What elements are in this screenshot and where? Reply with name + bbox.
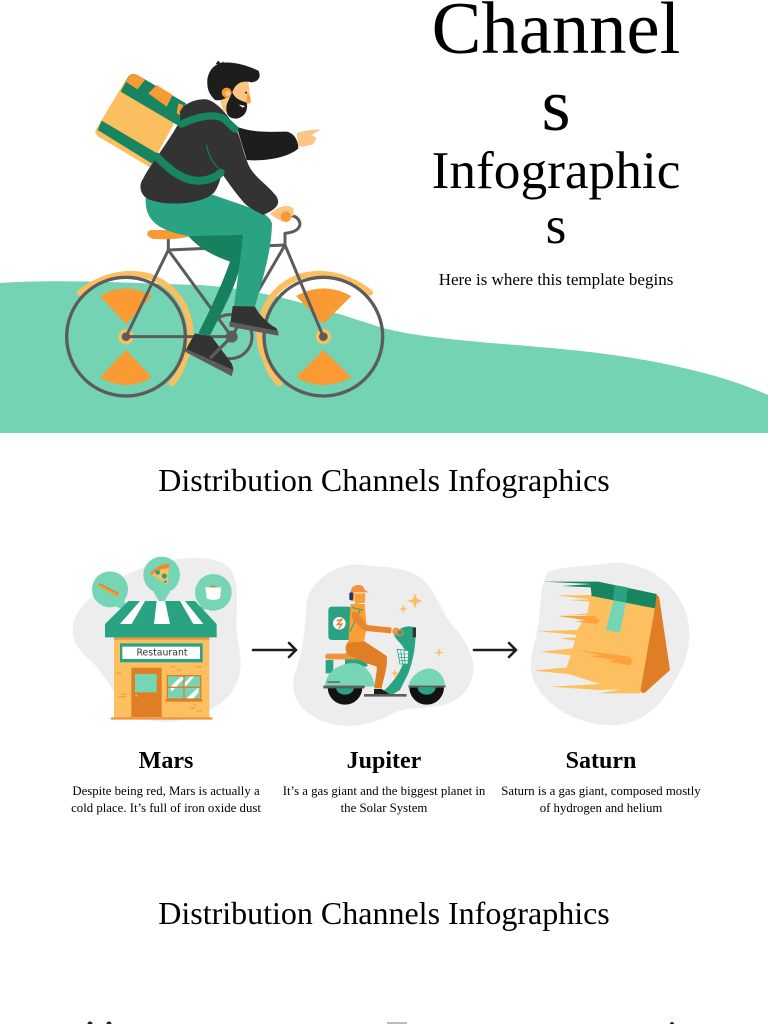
far shoe [185, 333, 233, 376]
scooter body [323, 626, 446, 697]
near shoe [230, 306, 278, 335]
crank and bottom bracket [210, 331, 238, 358]
tape strap [606, 585, 628, 633]
backpack straps [157, 116, 235, 181]
rear fender [80, 274, 191, 383]
illustration: cyclist on bicycle [67, 61, 383, 396]
icon: restaurant [73, 557, 241, 722]
column: mars: Despite being red, Mars is actually a [72, 784, 260, 798]
rider arm [352, 612, 392, 633]
rider straps [350, 607, 363, 632]
orange motion marks [557, 616, 633, 665]
restaurant sign [120, 643, 203, 662]
column: jupiter: It’s a gas giant and the biggest planet in [283, 784, 486, 798]
jacket [140, 99, 278, 215]
package top flap [543, 582, 657, 608]
column: saturn [501, 748, 701, 815]
icon: speeding package [531, 563, 689, 725]
rear wheel [67, 277, 185, 396]
column: jupiter [283, 748, 486, 815]
rider head and helmet [349, 585, 369, 604]
main title: Infographic [432, 140, 680, 200]
near leg trousers [146, 195, 272, 307]
clipped tops of next row icons [88, 1022, 674, 1024]
bubble food glyphs [98, 563, 221, 600]
grey blob [531, 563, 689, 725]
scooter wheels [328, 687, 444, 705]
handlebar grip [281, 211, 291, 222]
package side [640, 595, 670, 693]
column: saturn: Saturn [566, 748, 636, 774]
sparkle stars [390, 593, 444, 678]
shop window [166, 676, 202, 702]
bricks [117, 667, 202, 711]
rider leg [346, 641, 387, 688]
arrow: jupiter to saturn [474, 643, 516, 657]
green hill background [0, 281, 768, 433]
delivery bag [328, 607, 352, 640]
seat [325, 654, 367, 659]
main title [432, 0, 680, 255]
pointing hand [297, 129, 321, 147]
backpack [95, 74, 186, 167]
grey blob [293, 564, 473, 726]
dark far leg [188, 234, 243, 337]
rider hand on handlebar [392, 628, 403, 636]
section heading two: Distribution Channels Infographics [158, 895, 610, 931]
rider torso [348, 604, 367, 643]
column: saturn: Saturn is a gas giant, composed mostly [501, 784, 701, 798]
main title: s [541, 64, 571, 147]
food bubbles [92, 557, 232, 612]
column: saturn: of hydrogen and helium [540, 801, 662, 815]
package front with motion streaks [533, 595, 655, 693]
section heading one: Distribution Channels Infographics [158, 462, 610, 498]
subtitle: Here is where this template begins [439, 270, 673, 289]
icon: scooter delivery [293, 564, 473, 726]
pavement [111, 717, 213, 720]
grey blob [73, 558, 241, 722]
column: mars: cold place. It’s full of iron oxide dust [71, 801, 261, 815]
column: jupiter: the Solar System [341, 801, 427, 815]
main title: s [546, 195, 566, 255]
column: mars: Mars [139, 748, 193, 774]
shop building [114, 637, 209, 718]
head [207, 61, 260, 119]
saddle [147, 230, 189, 239]
door [131, 668, 162, 717]
rider shoe [374, 689, 389, 694]
bicycle frame [126, 216, 323, 359]
striped awning [105, 601, 217, 637]
front fender [259, 274, 370, 383]
far arm [237, 127, 298, 160]
column: mars [71, 748, 261, 815]
hand on handlebar [270, 206, 294, 222]
basket [397, 649, 409, 664]
restaurant sign: Restaurant [136, 648, 188, 659]
front wheel [264, 277, 383, 396]
arrow: mars to jupiter [253, 643, 296, 657]
column: jupiter: Jupiter [347, 748, 422, 774]
